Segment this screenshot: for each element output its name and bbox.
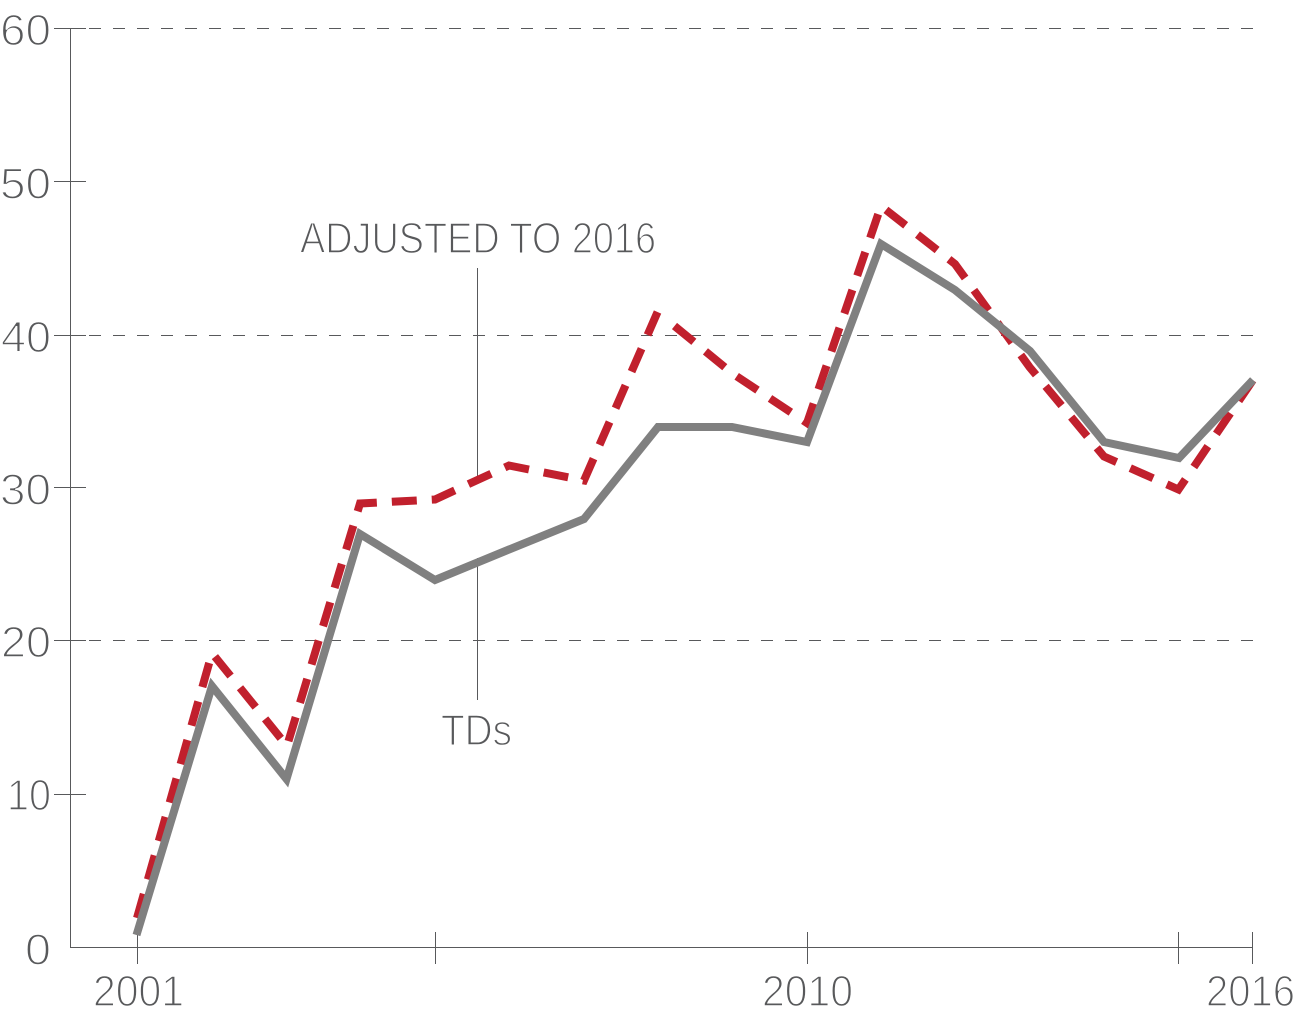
y axis labels: 20 [1, 618, 51, 667]
series: adjusted to 2016 [137, 206, 1253, 918]
x axis [70, 932, 1253, 964]
leader line: TDs [476, 558, 478, 700]
y axis labels [0, 6, 51, 974]
y axis labels: 10 [7, 771, 51, 820]
series: TDs [136, 244, 1253, 935]
label: TDs: TDs [441, 706, 512, 755]
y axis labels: 50 [0, 160, 51, 208]
y axis labels: 40 [1, 313, 51, 362]
x axis labels: 2001 [93, 967, 184, 1016]
x axis labels [93, 967, 1295, 1016]
label: adjusted to 2016: ADJUSTED TO 2016 [300, 214, 656, 263]
y axis labels: 60 [0, 6, 51, 55]
x axis labels: 2010 [762, 967, 853, 1016]
y axis labels: 30 [0, 466, 51, 514]
y axis labels: 0 [25, 926, 51, 974]
y axis [54, 28, 86, 948]
leader line: adjusted [476, 268, 478, 476]
